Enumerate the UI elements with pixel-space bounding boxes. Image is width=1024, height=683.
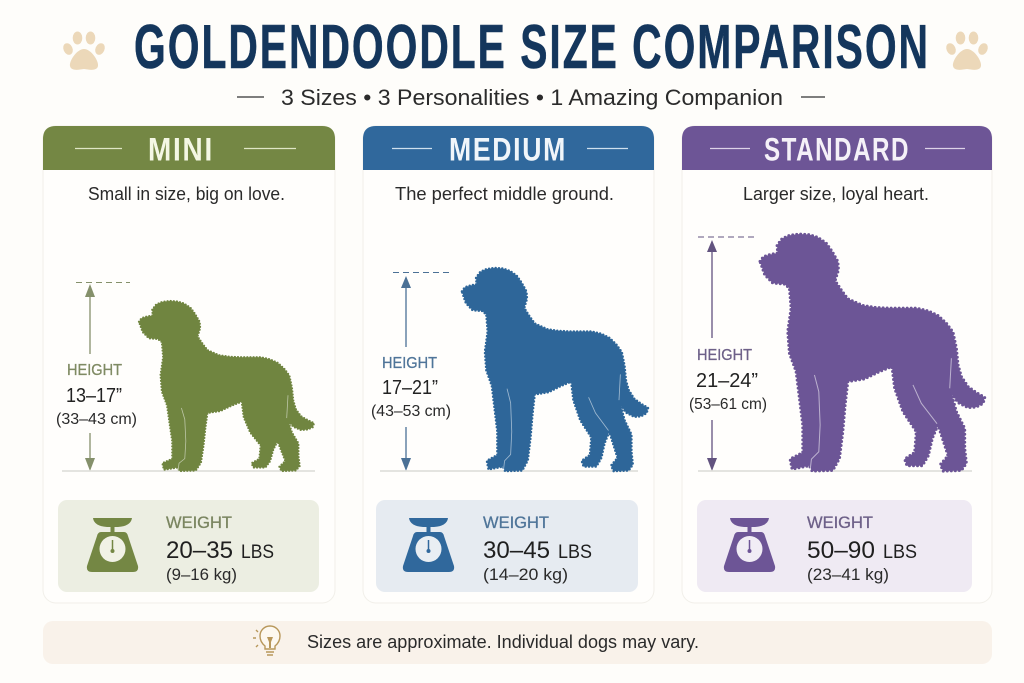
weight text: WEIGHT xyxy=(483,513,549,532)
header band xyxy=(363,126,654,170)
ground line xyxy=(62,470,315,472)
header title: STANDARD xyxy=(764,132,910,168)
height text: (33–43 cm) xyxy=(56,411,137,428)
subtitle: 3 Sizes • 3 Personalities • 1 Amazing Companion xyxy=(281,85,783,110)
weight text: 20–35 xyxy=(166,537,233,564)
icon: lightbulb xyxy=(253,626,280,655)
weight box xyxy=(58,500,319,592)
tagline: Small in size, big on love. xyxy=(88,184,285,204)
icon: left paw xyxy=(61,32,107,70)
weight box xyxy=(697,500,972,592)
weight text: (14–20 kg) xyxy=(483,565,568,584)
icon: scale xyxy=(87,518,138,572)
height text xyxy=(689,347,767,413)
panel: medium xyxy=(363,126,654,603)
weight text: (9–16 kg) xyxy=(166,565,237,584)
tagline: Larger size, loyal heart. xyxy=(743,184,929,204)
height arrow xyxy=(698,237,756,471)
header band xyxy=(43,126,335,170)
weight text xyxy=(483,513,592,584)
ground line xyxy=(380,470,638,472)
header band xyxy=(682,126,992,170)
tagline: The perfect middle ground. xyxy=(395,184,614,204)
dog silhouette xyxy=(760,234,985,471)
header title: MINI xyxy=(148,132,214,168)
height arrow xyxy=(393,272,450,471)
height text: (43–53 cm) xyxy=(371,403,451,420)
weight text xyxy=(807,513,917,584)
height text: HEIGHT xyxy=(67,362,122,379)
weight text: 50–90 xyxy=(807,537,875,564)
weight text: 30–45 xyxy=(483,537,550,564)
icon: right paw xyxy=(944,32,990,70)
footer note bar xyxy=(43,621,992,664)
weight text: LBS xyxy=(558,542,592,563)
icon: scale xyxy=(403,518,454,572)
height text: 13–17” xyxy=(66,385,122,407)
height arrow xyxy=(76,282,130,471)
dog silhouette xyxy=(462,268,648,471)
height text: 17–21” xyxy=(382,377,438,399)
note text: Sizes are approximate. Individual dogs may vary. xyxy=(307,632,699,652)
height text: HEIGHT xyxy=(382,355,437,372)
weight text: LBS xyxy=(241,542,274,563)
dog silhouette xyxy=(139,301,314,471)
panel: mini xyxy=(43,126,335,603)
icon: scale xyxy=(724,518,775,572)
card background xyxy=(363,126,654,603)
weight text xyxy=(166,513,274,584)
weight text: LBS xyxy=(883,542,917,563)
panel: standard xyxy=(682,126,992,603)
height text xyxy=(56,362,137,428)
weight box xyxy=(376,500,638,592)
weight text: WEIGHT xyxy=(807,513,873,532)
card background xyxy=(43,126,335,603)
height text: HEIGHT xyxy=(697,347,752,364)
height text: 21–24” xyxy=(696,370,758,392)
header title: MEDIUM xyxy=(449,132,567,168)
height text xyxy=(371,355,451,420)
ground line xyxy=(698,470,972,472)
weight text: (23–41 kg) xyxy=(807,565,889,584)
weight text: WEIGHT xyxy=(166,513,232,532)
height text: (53–61 cm) xyxy=(689,396,767,413)
card background xyxy=(682,126,992,603)
